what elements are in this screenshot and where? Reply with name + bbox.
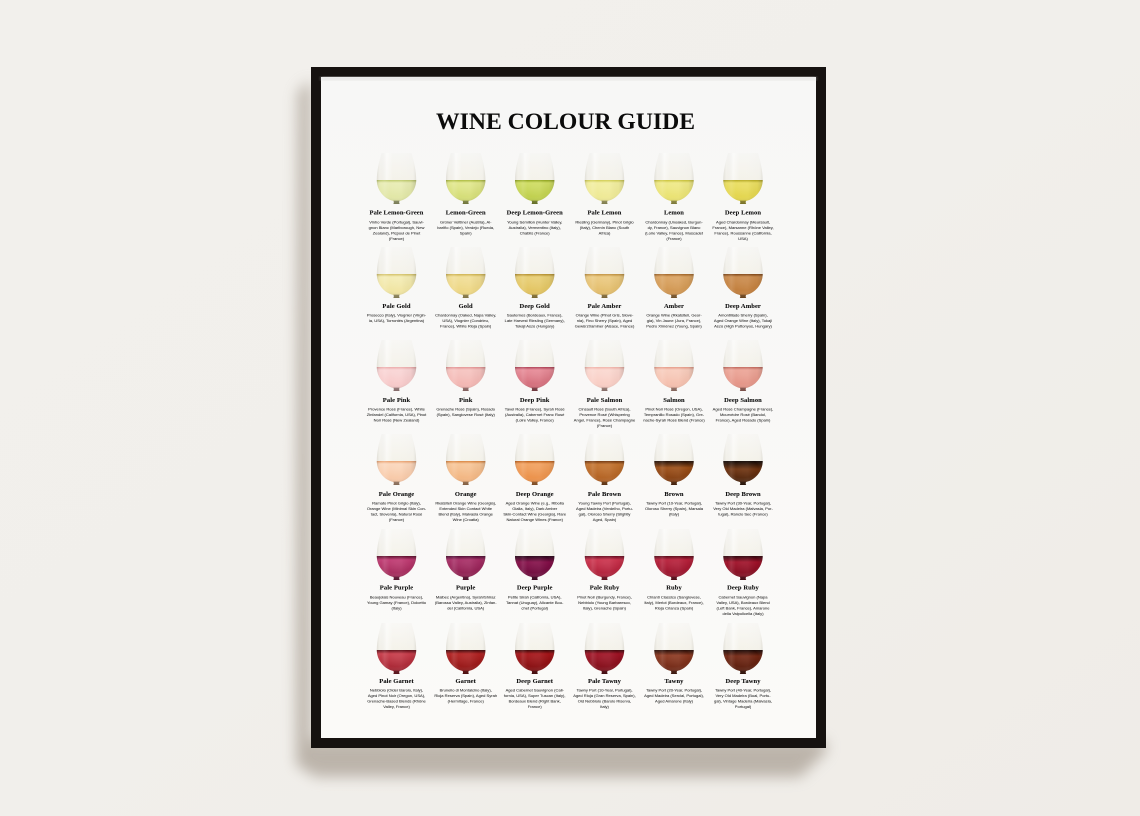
icon: wine glass gold: [446, 247, 485, 298]
description: Orange Wine (Minimal Skin Con-: [367, 506, 427, 511]
description: Gewürztraminer (Alsace, France): [575, 324, 635, 328]
description: Beaujolais Nouveau (France),: [370, 594, 423, 600]
name: Pale Orange: [379, 491, 414, 498]
description: Nebbiolo (Older Barolo, Italy),: [370, 688, 423, 692]
description: della Valpolicella (Italy): [722, 611, 764, 616]
icon: wine glass purple: [446, 529, 485, 580]
icon: wine glass deep amber: [723, 247, 763, 298]
icon: wine glass deep lemon-green: [515, 153, 554, 204]
description: Aszú (High Puttonyos, Hungary): [714, 324, 773, 328]
wine card: Ruby: [644, 529, 704, 610]
name: Deep Gold: [520, 303, 550, 310]
description: Gialla, Italy), Dark Amber: [512, 506, 558, 511]
icon: wine glass pale pink: [377, 340, 416, 391]
wine card: Pink: [436, 340, 496, 417]
description: (France): [666, 236, 682, 241]
description: (Hermitage, France): [448, 698, 484, 704]
description: Tannat (Uruguay), Alicante Bou-: [506, 600, 564, 605]
name: Deep Garnet: [516, 678, 554, 685]
description: Italy): [600, 704, 610, 709]
description: Aged, Spain): [593, 517, 617, 522]
description: Africa): [599, 230, 611, 236]
description: (Loire Valley, France), Muscadet: [645, 230, 704, 236]
icon: wine glass lemon: [654, 153, 694, 204]
description: Provence Rosé (France), White: [368, 406, 426, 412]
description: Italy), Merlot (Bordeaux, France),: [644, 600, 704, 605]
name: Deep Salmon: [724, 397, 762, 404]
description: France), Aged Rosado (Spain): [716, 418, 771, 422]
name: Purple: [456, 584, 475, 592]
description: Rkatsiteli Orange Wine (Georgia),: [435, 500, 496, 506]
description: tact, Slovenia), Natural Rosé: [371, 512, 423, 516]
description: Tawny Port (10-Year, Portugal),: [576, 688, 633, 692]
description: tugal), Rancio Sec (France): [718, 512, 768, 516]
wine card: Deep Lemon: [712, 153, 774, 241]
description: (Loire Valley, France): [516, 418, 554, 422]
icon: wine glass brown: [654, 434, 694, 485]
icon: wine glass orange: [446, 434, 485, 485]
name: Pale Gold: [382, 303, 411, 310]
description: Aged Cabernet Sauvignon (Cali-: [506, 688, 564, 692]
description: Tavel Rosé (France), Syrah Rosé: [505, 406, 565, 412]
wine card: Pale Lemon: [575, 153, 634, 236]
icon: wine glass garnet: [446, 623, 485, 674]
name: Deep Lemon: [725, 210, 761, 217]
icon: wine glass pale brown: [585, 434, 624, 485]
description: Tokaji Aszú (Hungary): [515, 324, 555, 328]
name: Lemon-Green: [446, 210, 486, 217]
icon: wine glass deep ruby: [723, 529, 763, 580]
name: Salmon: [663, 397, 685, 404]
description: gia), Vin Jaune (Jura, France),: [647, 318, 701, 323]
description: Aged Madeira (Verdelho, Portu-: [576, 506, 634, 511]
description: Pedro Ximénez (Young, Spain): [646, 324, 702, 328]
wine card: Deep Orange: [503, 434, 567, 522]
icon: wine glass deep gold: [515, 247, 554, 298]
description: Skin-Contact Wine (Georgia), Rare: [503, 512, 567, 516]
icon: wine glass amber: [654, 247, 694, 298]
description: (Italy), Chenin Blanc (South: [580, 225, 629, 230]
icon: wine glass pale lemon-green: [377, 153, 416, 204]
description: Amontillado Sherry (Spain),: [718, 312, 768, 318]
name: Pale Ruby: [590, 584, 620, 592]
description: Noir Rosé (New Zealand): [374, 418, 420, 422]
description: Cabernet Sauvignon (Napa: [718, 594, 768, 600]
name: Deep Brown: [725, 491, 761, 498]
description: gnon Blanc (Marlborough, New: [369, 225, 424, 230]
description: Wine (Croatia): [453, 517, 479, 522]
description: Malbec (Argentina), Syrah/Shiraz: [436, 594, 496, 600]
description: (Left Bank, France), Amarone: [716, 606, 770, 610]
icon: wine glass tawny: [654, 623, 694, 674]
icon: wine glass salmon: [654, 340, 694, 391]
description: Grüner Veltliner (Austria), Al-: [440, 220, 492, 224]
icon: wine glass pale garnet: [377, 623, 416, 674]
description: Natural Orange Wines (France): [506, 517, 564, 522]
description: Pinot Noir (Burgundy, France),: [577, 594, 632, 600]
icon: wine glass pale purple: [377, 529, 416, 580]
wine card: Amber: [646, 247, 702, 328]
name: Pale Lemon: [587, 210, 622, 217]
wine card: Pale Orange: [367, 434, 427, 522]
description: Bordeaux Blend (Right Bank,: [509, 698, 561, 704]
description: France), Marsanne (Rhône Valley,: [712, 225, 774, 230]
name: Ruby: [666, 584, 682, 592]
description: Mourvèdre Rosé (Bandol,: [720, 412, 766, 417]
name: Orange: [455, 491, 476, 498]
description: Aged Rioja (Gran Reserva, Spain),: [573, 693, 636, 698]
description: Italy), Grenache (Spain): [583, 606, 627, 610]
description: Grenache-Based Blends (Rhône: [367, 698, 426, 704]
description: bariño (Spain), Verdejo (Rueda,: [437, 225, 494, 230]
wine card: Deep Gold: [505, 247, 565, 328]
name: Amber: [664, 303, 684, 310]
wine card: Garnet: [434, 623, 497, 704]
description: Australia), Vermentino (Italy),: [509, 225, 561, 230]
description: Orange Wine (Pinot Gris, Slove-: [576, 312, 634, 318]
description: Rioja Reserva (Spain), Aged Syrah: [434, 693, 497, 698]
description: Pinot Noir Rosé (Oregon, USA),: [645, 406, 703, 412]
wine card: Pale Lemon-Green: [369, 153, 424, 241]
description: Tawny Port (40-Year, Portugal),: [715, 688, 771, 692]
description: gal), Oloroso Sherry (Slightly: [579, 512, 631, 516]
wine card: Orange: [435, 434, 496, 522]
description: Old Nebbiolo (Barolo Riserva,: [578, 698, 631, 704]
description: Aged Madeira (Sercial, Portugal),: [644, 693, 704, 698]
description: Angel, France), Rosé Champagne: [574, 418, 636, 422]
description: Aged Orange Wine (Italy), Tokaji: [714, 318, 772, 323]
description: Nebbiolo (Young Barbaresco,: [578, 600, 631, 605]
name: Deep Tawny: [725, 678, 761, 685]
description: Aged Orange Wine (e.g., Ribolla: [506, 500, 565, 506]
name: Pale Pink: [383, 397, 411, 404]
name: Deep Lemon-Green: [507, 210, 563, 217]
name: Garnet: [455, 678, 477, 685]
icon: wine glass deep tawny: [723, 623, 763, 674]
description: Very Old Madeira (Malvasia, Por-: [713, 506, 773, 511]
icon: wine glass deep salmon: [723, 340, 763, 391]
description: Rioja Crianza (Spain): [655, 606, 694, 610]
icon: wine glass pale amber: [585, 247, 624, 298]
description: Orange Wine (Rkatsiteli, Geor-: [646, 312, 702, 318]
wine card: Pale Salmon: [574, 340, 636, 428]
wine card: Pale Pink: [367, 340, 427, 422]
description: Young Tawny Port (Portugal),: [578, 500, 631, 506]
description: Late Harvest Riesling (Germany),: [505, 318, 565, 323]
description: chet (Portugal): [521, 606, 549, 610]
icon: wine glass ruby: [654, 529, 694, 580]
description: Cinsault Rosé (South Africa),: [579, 406, 630, 412]
description: France), Roussanne (California,: [714, 230, 772, 236]
wine card: Pale Gold: [367, 247, 427, 323]
description: (Italy): [391, 606, 402, 610]
description: nache-Syrah Rosé Blend (France): [643, 418, 705, 422]
wine card: Pale Amber: [575, 247, 635, 328]
description: Provence Rosé (Whispering: [579, 412, 630, 417]
icon: wine glass pale orange: [377, 434, 416, 485]
name: Tawny: [664, 678, 684, 685]
description: Aged Chardonnay (Meursault,: [716, 220, 770, 224]
wine card: Purple: [435, 529, 497, 610]
name: Deep Purple: [517, 584, 552, 592]
icon: wine glass deep lemon: [723, 153, 763, 204]
wine card: Salmon: [643, 340, 705, 422]
description: Chianti Classico (Sangiovese,: [647, 594, 701, 600]
description: ia, USA), Torrontés (Argentina): [369, 318, 425, 323]
description: Extended Skin Contact White: [439, 506, 493, 511]
wine card: Deep Lemon-Green: [507, 153, 563, 236]
wine card: Deep Tawny: [714, 623, 772, 709]
wine card: Pale Garnet: [367, 623, 426, 709]
wine card: Gold: [435, 247, 496, 328]
description: Chardonnay (Unoaked, Burgun-: [645, 220, 703, 224]
wine card: Brown: [645, 434, 704, 516]
description: Tawny Port (10-Year, Portugal),: [646, 500, 702, 506]
name: Pale Garnet: [379, 678, 414, 685]
icon: wine glass pink: [446, 340, 485, 391]
wine card: Tawny: [644, 623, 704, 704]
description: fornia, USA), Super Tuscan (Italy),: [504, 693, 566, 698]
description: Young Sémillon (Hunter Valley,: [507, 220, 562, 224]
icon: wine glass pale gold: [377, 247, 416, 298]
name: Deep Amber: [725, 303, 761, 310]
icon: wine glass pale lemon: [585, 153, 624, 204]
white poster panel: [321, 77, 816, 738]
black picture frame: [311, 67, 826, 748]
wine card: Deep Brown: [713, 434, 773, 516]
description: Brunello di Montalcino (Italy),: [440, 688, 492, 692]
wine card: Deep Salmon: [713, 340, 773, 422]
icon: wine glass deep pink: [515, 340, 554, 391]
description: USA): [738, 236, 748, 241]
name: Lemon: [664, 210, 684, 217]
wine card: Pale Purple: [367, 529, 427, 610]
description: Portugal): [735, 704, 752, 709]
name: Deep Pink: [520, 397, 550, 404]
icon: wine glass deep orange: [515, 434, 554, 485]
description: Ramato Pinot Grigio (Italy),: [372, 500, 421, 506]
icon: wine glass deep garnet: [515, 623, 554, 674]
wine card: Pale Ruby: [577, 529, 632, 610]
description: Very Old Madeira (Boal, Portu-: [715, 693, 771, 698]
icon: wine glass pale tawny: [585, 623, 624, 674]
description: (France): [389, 236, 405, 241]
description: Spain): [460, 230, 472, 236]
name: Pale Salmon: [587, 397, 623, 404]
icon: wine glass lemon-green: [446, 153, 485, 204]
description: (Italy): [669, 512, 680, 516]
description: (France): [389, 517, 405, 522]
description: (Barossa Valley, Australia), Zinfan-: [435, 600, 497, 605]
name: Gold: [459, 303, 473, 310]
description: Riesling (Germany), Pinot Grigio: [575, 220, 634, 224]
name: Pale Brown: [588, 491, 621, 498]
description: Tawny Port (30-Year, Portugal),: [715, 500, 771, 506]
description: Prosecco (Italy), Viognier (Virgin-: [367, 312, 427, 318]
title: WINE COLOUR GUIDE: [436, 109, 695, 134]
icon: wine glass pale ruby: [585, 529, 624, 580]
description: Oloroso Sherry (Spain), Marsala: [645, 506, 704, 511]
description: del (California, USA): [447, 606, 485, 610]
description: Aged Amarone (Italy): [655, 698, 694, 704]
name: Brown: [664, 491, 684, 498]
wine card: Pale Tawny: [573, 623, 636, 709]
wine card: Lemon: [645, 153, 704, 241]
description: Valley, USA), Bordeaux Blend: [716, 600, 770, 605]
wine card: Deep Garnet: [504, 623, 566, 709]
description: Aged Pinot Noir (Oregon, USA),: [368, 693, 425, 698]
name: Deep Ruby: [727, 584, 760, 592]
frame shadow on wall: [296, 80, 826, 777]
description: Chardonnay (Oaked, Napa Valley,: [435, 312, 496, 318]
icon: wine glass pale salmon: [585, 340, 624, 391]
description: Zinfandel (California, USA), Pinot: [367, 412, 427, 417]
description: France): [528, 704, 542, 709]
description: Sauternes (Bordeaux, France),: [507, 312, 562, 318]
name: Pale Amber: [588, 303, 621, 310]
description: dy, France), Sauvignon Blanc: [648, 225, 700, 230]
description: Grenache Rosé (Spain), Rosado: [436, 406, 496, 412]
description: nia), Fino Sherry (Spain), Aged: [577, 318, 632, 323]
icon: wine glass deep purple: [515, 529, 554, 580]
description: Zealand), Picpoul de Pinet: [373, 230, 421, 236]
description: Chablis (France): [520, 230, 550, 236]
wine card: Lemon-Green: [437, 153, 494, 236]
icon: wine glass deep brown: [723, 434, 763, 485]
description: Blend (Italy), Malvasia Orange: [438, 512, 494, 516]
name: Pale Tawny: [588, 678, 622, 685]
description: (Spain), Sangiovese Rosé (Italy): [437, 412, 495, 417]
description: Tawny Port (20-Year, Portugal),: [646, 688, 702, 692]
wine card: Deep Ruby: [716, 529, 770, 616]
name: Pale Purple: [380, 584, 413, 592]
description: Tempranillo Rosado (Spain), Gre-: [644, 412, 705, 417]
wine card: Deep Purple: [506, 529, 564, 610]
description: France), White Rioja (Spain): [440, 324, 492, 328]
name: Pale Lemon-Green: [369, 210, 424, 217]
description: Vinho Verde (Portugal), Sauvi-: [369, 220, 424, 224]
description: (Australia), Cabernet Franc Rosé: [505, 412, 565, 417]
wine card: Deep Pink: [505, 340, 565, 422]
description: USA), Viognier (Condrieu,: [442, 318, 489, 323]
description: Young Gamay (France), Dolcetto: [367, 600, 427, 605]
description: Aged Rosé Champagne (France),: [713, 406, 773, 412]
name: Deep Orange: [516, 491, 554, 498]
description: Petite Sirah (California, USA),: [508, 594, 561, 600]
name: Pink: [459, 397, 473, 404]
wine card: Deep Amber: [714, 247, 773, 328]
description: (France): [597, 423, 613, 428]
description: Valley, France): [383, 704, 410, 709]
description: gal), Vintage Madeira (Malvasia,: [714, 698, 772, 704]
wine card: Pale Brown: [576, 434, 634, 522]
